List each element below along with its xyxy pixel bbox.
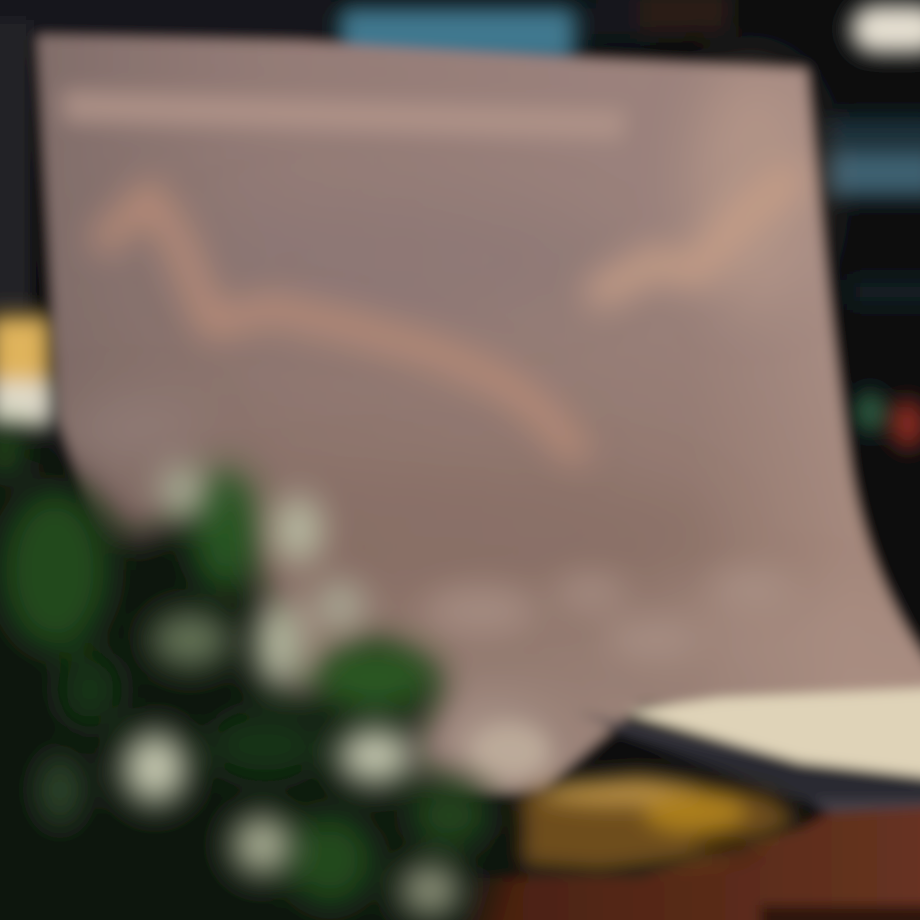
background: yellow note left bbox=[0, 316, 52, 426]
background: blue shelf glow top bbox=[340, 0, 730, 64]
line chart: rising trend bbox=[600, 180, 790, 292]
heading bar on paper bbox=[62, 90, 626, 140]
faint table rows on lower paper bbox=[424, 570, 790, 660]
background: red and green lights right bbox=[856, 392, 920, 448]
panel: paper sheet bbox=[38, 36, 920, 800]
plant: white blossoms bbox=[40, 466, 460, 916]
background: white lamp top right bbox=[852, 6, 920, 52]
notebook bottom right bbox=[575, 688, 920, 816]
background: right side blue stripes bbox=[830, 118, 920, 304]
table surface bbox=[460, 806, 920, 920]
paper shading bbox=[60, 70, 880, 776]
plant: green leaves bbox=[0, 428, 490, 906]
plant: dark foliage bbox=[0, 428, 510, 920]
line chart: falling trend bbox=[105, 195, 575, 450]
golden object on table bbox=[470, 724, 800, 872]
